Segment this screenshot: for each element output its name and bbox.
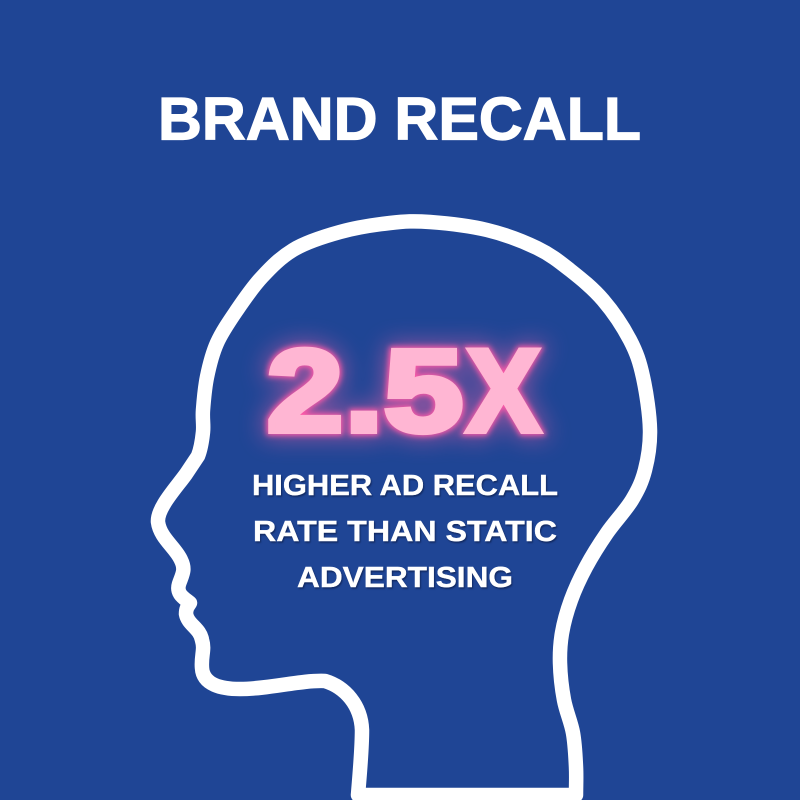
stat description: ADVERTISING [297, 562, 513, 594]
stat description: HIGHER AD RECALL [252, 470, 558, 502]
big stat: 2.5X: 5 [384, 326, 463, 456]
big stat: 2.5X: . [345, 326, 383, 456]
big stat: 2.5X: 2 [267, 326, 343, 456]
big stat: 2.5X: X [467, 326, 540, 456]
title: BRAND RECALL [158, 86, 641, 152]
big stat: 2.5X: X [467, 326, 540, 456]
big stat: 2.5X: . [345, 326, 383, 456]
big stat: 2.5X: . [345, 326, 383, 456]
big stat: 2.5X: 2 [267, 326, 343, 456]
big stat: 2.5X: X [467, 326, 540, 456]
stat description [252, 470, 558, 594]
big stat: 2.5X [267, 326, 540, 456]
big stat: 2.5X: 2 [267, 326, 343, 456]
big stat: 2.5X: 5 [384, 326, 463, 456]
stat description: RATE THAN STATIC [253, 516, 557, 548]
icon: head outline [158, 221, 650, 795]
big stat: 2.5X: 5 [384, 326, 463, 456]
